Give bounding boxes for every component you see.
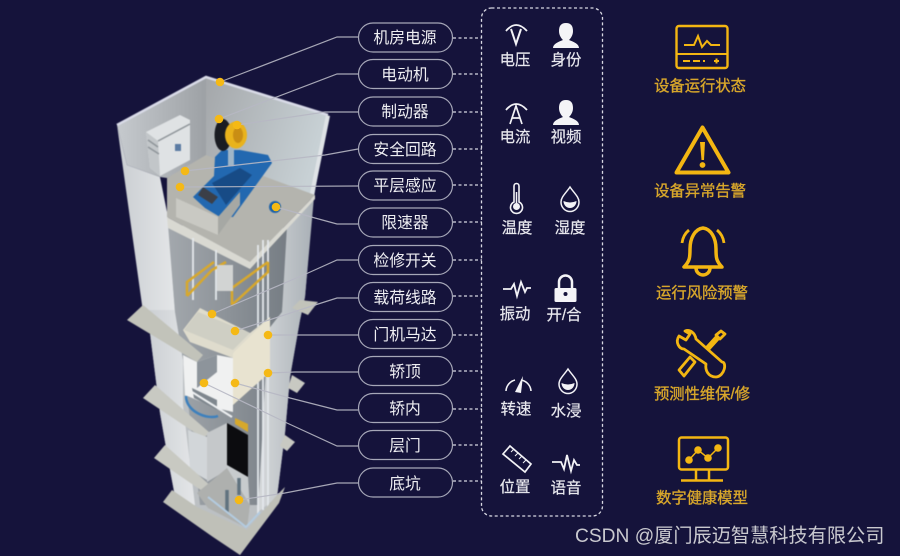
label: 底坑	[358, 468, 452, 497]
label: 制动器	[358, 97, 452, 126]
label: 轿顶: 轿顶	[389, 363, 421, 381]
label: 限速器: 限速器	[381, 214, 429, 232]
label: 限速器	[358, 208, 452, 237]
guide rails and ropes	[193, 238, 268, 515]
panel: sensor types	[482, 8, 602, 516]
component labels	[358, 23, 452, 497]
label: 轿内: 轿内	[389, 400, 421, 418]
sensor: 电流	[500, 104, 530, 146]
sensor: 湿度	[555, 187, 585, 237]
yellow safety railings	[187, 262, 268, 305]
heading: 数字健康模型: 数字健康模型	[656, 490, 748, 507]
sensor: 水浸	[551, 369, 581, 420]
sensor: 振动	[500, 282, 531, 323]
cabinet	[146, 115, 190, 176]
inner back wall left	[117, 77, 206, 178]
icon: wrench and screwdriver	[677, 330, 725, 377]
label: 检修开关	[358, 246, 452, 274]
right column face	[258, 197, 314, 512]
sensor: 湿度: 湿度	[555, 219, 585, 237]
sensor: 水浸: 水浸	[551, 402, 581, 420]
sensor: 电压: 电压	[500, 51, 530, 69]
label: 平层感应	[358, 171, 452, 200]
sensor: 开/合: 开/合	[546, 306, 582, 324]
label: 平层感应: 平层感应	[373, 176, 437, 195]
label: 制动器: 制动器	[381, 103, 429, 121]
hoistway interior	[168, 225, 290, 505]
sensor: 电流: 电流	[500, 128, 530, 146]
blue cable	[186, 396, 218, 417]
label: 层门: 层门	[389, 437, 421, 455]
icon: alarm bell	[682, 228, 724, 275]
label: 轿顶	[358, 356, 452, 386]
sensor: 语音: 语音	[551, 479, 581, 497]
traction wheel	[214, 119, 232, 151]
label: 载荷线路	[358, 282, 452, 312]
heading: 设备异常告警: 设备异常告警	[654, 183, 746, 200]
top rim	[117, 77, 328, 125]
upper floor slab	[127, 305, 203, 362]
sensor: 温度	[502, 184, 532, 237]
speed governor	[269, 201, 281, 213]
sensor dots	[176, 78, 280, 504]
sensor: 身份: 身份	[551, 51, 581, 69]
buffers	[227, 478, 239, 512]
sensor: 转速: 转速	[501, 400, 531, 418]
sensor: 身份	[551, 23, 581, 69]
heading: 运行风险预警: 运行风险预警	[656, 285, 748, 302]
label: 检修开关: 检修开关	[373, 252, 437, 270]
label: 安全回路: 安全回路	[373, 141, 437, 159]
sensor: 视频	[551, 100, 581, 146]
elevator shaft illustration	[117, 77, 330, 555]
sensor: 语音	[551, 455, 581, 497]
dashed panel border	[482, 8, 602, 516]
door recess	[188, 430, 207, 480]
sensor: 温度: 温度	[502, 219, 532, 237]
label: 门机马达	[358, 320, 452, 348]
concrete block	[176, 198, 218, 235]
sensor: 电压	[500, 25, 530, 69]
label: 机房电源	[358, 23, 452, 52]
dashed links from labels to sensor box	[453, 38, 482, 481]
sensor: 转速	[501, 376, 531, 418]
icon: status monitor	[676, 26, 728, 68]
machine room floor	[167, 155, 315, 262]
label: 门机马达: 门机马达	[373, 326, 437, 344]
car top	[183, 308, 270, 358]
icon: warning triangle	[676, 128, 728, 172]
column: monitoring capabilities	[654, 26, 750, 507]
car interior	[183, 355, 233, 412]
heading: 设备运行状态: 设备运行状态	[654, 78, 746, 95]
sensor: 振动: 振动	[500, 305, 530, 323]
lower shaft body	[143, 200, 313, 540]
middle slab	[143, 385, 210, 438]
lower slab	[154, 445, 213, 495]
label: 电动机	[358, 60, 452, 88]
label: 电动机: 电动机	[381, 66, 429, 84]
inner back wall right	[206, 77, 328, 197]
heading: 预测性维保/修: 预测性维保/修	[654, 386, 750, 403]
blue traction machine	[193, 150, 272, 217]
label: 轿内	[358, 394, 452, 422]
pit floor	[163, 487, 285, 555]
label: 机房电源: 机房电源	[373, 29, 437, 47]
sensor: 开/合	[546, 276, 582, 324]
sensor: 位置: 位置	[500, 478, 530, 496]
car side panel	[233, 317, 270, 405]
icon: health model monitor	[679, 438, 728, 480]
pit back wall	[227, 465, 250, 510]
left outer wall	[117, 125, 175, 312]
connector lines to sensors	[180, 37, 358, 500]
label: 载荷线路: 载荷线路	[373, 289, 437, 307]
label: 层门	[358, 430, 452, 460]
label: 安全回路	[358, 134, 452, 164]
left column	[143, 310, 195, 507]
sensor: 视频: 视频	[551, 128, 581, 146]
watermark: CSDN @厦门辰迈智慧科技有限公司	[575, 525, 884, 547]
black counterweight door	[227, 423, 248, 477]
sensor: 位置	[500, 446, 531, 496]
label: 底坑: 底坑	[389, 475, 421, 493]
